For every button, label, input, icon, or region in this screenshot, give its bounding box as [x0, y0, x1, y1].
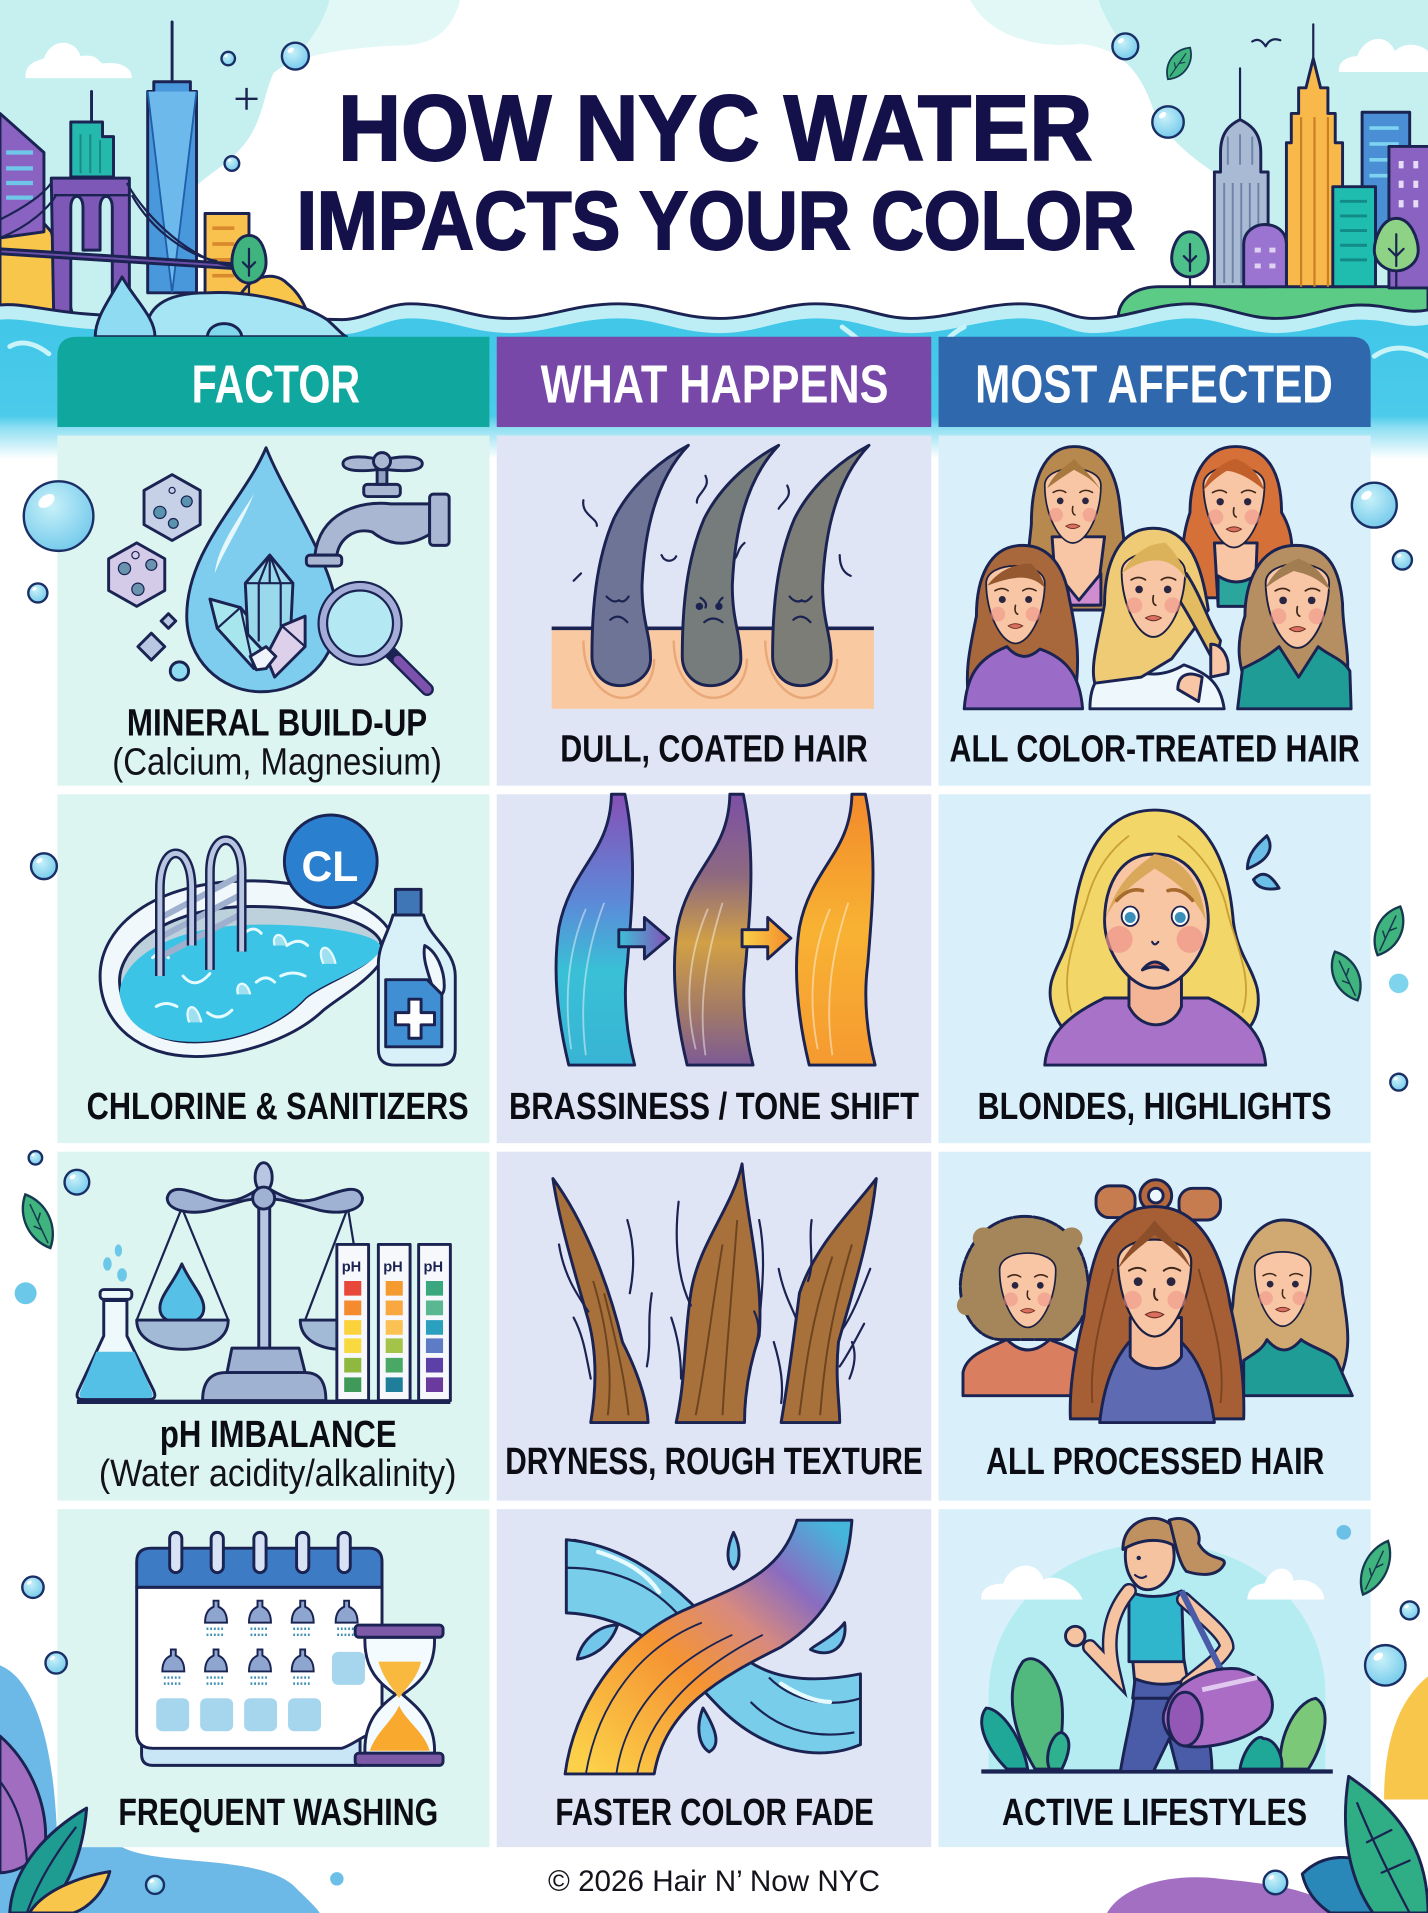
header: what happens: WHAT HAPPENS: [541, 355, 889, 415]
water drop: [95, 277, 155, 337]
woman top right: [1183, 447, 1292, 606]
bottom-left foliage: [0, 1736, 344, 1913]
icon: calendar of showers with hourglass: [137, 1532, 443, 1765]
figure: [1066, 1518, 1272, 1771]
small purple dome: [1244, 224, 1286, 287]
title: HOW NYC WATER: [338, 76, 1092, 180]
bird: [1252, 39, 1280, 46]
panel: active lifestyles: [939, 1509, 1371, 1847]
label: pH IMBALANCE: [160, 1414, 397, 1456]
bridge deck and cables: [0, 183, 232, 268]
label: MINERAL BUILD-UP: [127, 703, 427, 745]
title: [297, 76, 1135, 267]
footer copyright: © 2026 Hair N’ Now NYC: [548, 1865, 880, 1898]
panel: chlorine and sanitizers: [57, 794, 489, 1143]
tree left: [232, 235, 266, 293]
panel: dryness rough texture: [497, 1152, 931, 1501]
panel: brassiness tone shift: [497, 794, 931, 1143]
pH strip 3: [419, 1244, 450, 1401]
panel: dull coated hair: [497, 436, 931, 786]
icon: three women with processed hair: [957, 1180, 1352, 1423]
icon: pool, chlorine bubble and bottle: CL: [301, 843, 358, 891]
water waves: [0, 277, 1428, 461]
empire state building: [1286, 24, 1343, 287]
label: (Water acidity/alkalinity): [99, 1453, 456, 1495]
pH strip 1: [337, 1244, 369, 1401]
label: FASTER COLOR FADE: [555, 1792, 874, 1834]
bridge tower: [51, 178, 129, 317]
ground line: [981, 1770, 1333, 1773]
flask: [77, 1290, 155, 1399]
woman left: [964, 545, 1083, 709]
label: BRASSINESS / TONE SHIFT: [509, 1086, 919, 1128]
label: DRYNESS, ROUGH TEXTURE: [505, 1441, 923, 1483]
right hill: [238, 276, 310, 320]
woman right: [1238, 545, 1351, 709]
label: [112, 703, 442, 784]
woman wavy blonde: [1230, 1220, 1352, 1396]
panel: blondes highlights: [939, 794, 1371, 1143]
orange building: [205, 214, 249, 299]
woman top left: [1027, 447, 1125, 610]
woman centre blonde: [1090, 528, 1228, 709]
panel: all processed hair: [939, 1152, 1371, 1501]
table header row: [57, 337, 1371, 427]
panel: faster color fade: [497, 1509, 931, 1847]
pH strip 1: pH: [342, 1259, 361, 1275]
header: what happens: [497, 337, 931, 427]
label: CHLORINE & SANITIZERS: [87, 1086, 469, 1128]
pH strip 2: pH: [383, 1259, 403, 1275]
icon: jogging woman with gym bag: [981, 1518, 1333, 1771]
side bubbles and leaves: [14, 481, 1419, 1686]
green island: [1118, 287, 1428, 329]
label: ACTIVE LIFESTYLES: [1002, 1792, 1307, 1834]
panel: all color-treated hair: [939, 436, 1371, 786]
label: [99, 1414, 456, 1495]
icon: scale, flask and pH strips: [77, 1163, 450, 1402]
floating bubbles top: [221, 33, 1198, 171]
domed tower: [1214, 68, 1268, 287]
label: BLONDES, HIGHLIGHTS: [978, 1086, 1332, 1128]
splash blob: [146, 293, 347, 337]
cloud right: [1339, 39, 1428, 72]
bottom-right foliage: [1264, 1776, 1428, 1913]
header: factor: FACTOR: [192, 355, 360, 415]
blue building: [1362, 112, 1410, 234]
label: ALL PROCESSED HAIR: [986, 1441, 1324, 1483]
cloud left: [26, 43, 132, 78]
one world trade tower: [148, 22, 197, 293]
title: IMPACTS YOUR COLOR: [297, 174, 1135, 267]
pH strip 2: [378, 1244, 410, 1401]
teal building: [71, 92, 114, 177]
panel: pH imbalance: [57, 1152, 489, 1501]
left plant: [982, 1659, 1069, 1769]
header: factor: [57, 337, 489, 427]
yellow hill: [0, 204, 73, 317]
label: (Calcium, Magnesium): [112, 742, 442, 784]
left NYC skyline with bridge: [0, 22, 310, 320]
header: most affected: MOST AFFECTED: [975, 355, 1333, 415]
right NYC skyline: [1118, 24, 1428, 329]
icon: hair strands changing tone: [556, 794, 875, 1065]
pH strip 3: pH: [424, 1259, 443, 1275]
panel: mineral build-up: [57, 436, 489, 786]
teal building: [1333, 187, 1376, 287]
icon: worried blonde woman: [1045, 810, 1279, 1065]
woman centre with rollers: [1070, 1180, 1244, 1423]
icon: group of five women: [964, 447, 1351, 709]
panel: frequent washing: [57, 1509, 489, 1847]
right plant: [1240, 1698, 1325, 1769]
icon: dull hair follicles: [552, 445, 874, 709]
purple building: [1389, 146, 1428, 288]
decorative blobs bottom: [0, 1665, 1428, 1913]
trees right: [1172, 218, 1418, 287]
header: most affected: [939, 337, 1371, 427]
label: FREQUENT WASHING: [118, 1792, 438, 1834]
purple building: [0, 113, 44, 238]
hourglass: [355, 1625, 443, 1765]
label: DULL, COATED HAIR: [560, 728, 868, 770]
icon: water drop with crystals, faucet and magnifier: [109, 448, 449, 692]
icon: colour washing out of hair into water: [565, 1520, 860, 1774]
woman curly: [957, 1216, 1094, 1396]
icon: pool, chlorine bubble and bottle: [100, 815, 455, 1065]
icon: rough dry hair strands: [553, 1164, 876, 1423]
